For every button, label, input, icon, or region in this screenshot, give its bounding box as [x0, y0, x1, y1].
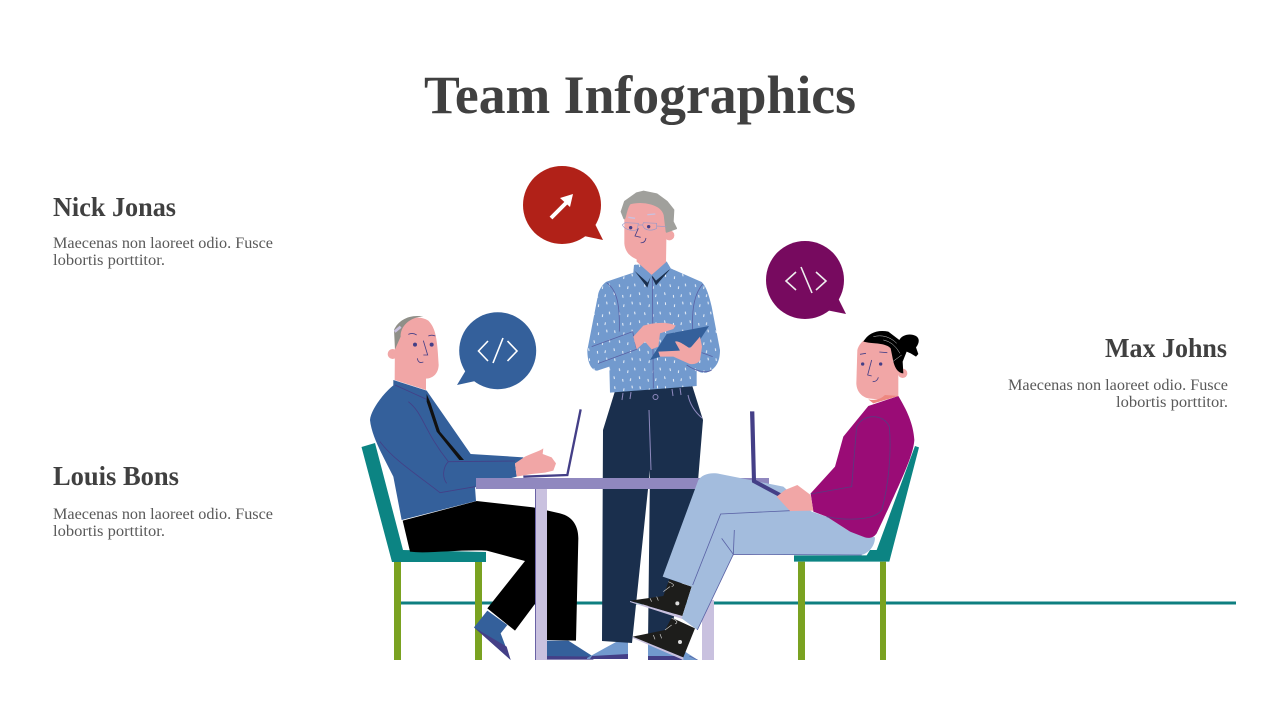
collar [634, 269, 670, 288]
person: middle man upper body [587, 192, 720, 393]
face [408, 333, 435, 363]
speech bubble: red arrow [523, 166, 603, 244]
shoe [547, 641, 593, 659]
floor line [400, 602, 1236, 604]
text block: Nick Jonas: Nick Jonas [53, 192, 176, 222]
jeans [663, 473, 875, 630]
laptop [750, 411, 782, 497]
table left leg [535, 489, 547, 660]
neck and head [395, 318, 439, 390]
sweater [811, 396, 914, 538]
text block: Louis Bons: lobortis porttitor. [53, 523, 165, 540]
text block: Louis Bons [53, 461, 273, 540]
tablet [650, 326, 709, 360]
text block: Nick Jonas: lobortis porttitor. [53, 252, 165, 269]
lower shoe [682, 653, 697, 660]
hair [622, 192, 676, 232]
left chair [362, 443, 486, 660]
laptop [523, 409, 581, 477]
table right leg [702, 600, 714, 660]
neck and head [856, 335, 898, 400]
text block: Max Johns: Max Johns [1105, 333, 1227, 363]
hair [863, 331, 919, 373]
person: left man seated (Nick) [370, 316, 593, 660]
face [860, 352, 887, 382]
shoes [587, 642, 628, 659]
title: Team Infographics [424, 65, 856, 125]
person: middle man standing [587, 385, 703, 660]
text block: Nick Jonas: Maecenas non laoreet odio. Fusce [53, 235, 273, 252]
back foot [474, 611, 511, 660]
person: right man seated (Max) [630, 331, 919, 660]
right chair [794, 446, 919, 660]
shirt [587, 262, 720, 393]
hands [633, 323, 676, 349]
sole, upper shoe [630, 601, 682, 619]
text block: Nick Jonas [53, 192, 273, 269]
text block: Louis Bons: Louis Bons [53, 461, 179, 491]
tie [427, 394, 464, 460]
neck and head [624, 199, 667, 275]
text block: Max Johns: lobortis porttitor. [1116, 394, 1228, 411]
text block: Max Johns [1008, 333, 1228, 411]
text block: Max Johns: Maecenas non laoreet odio. Fusce [1008, 377, 1228, 394]
glasses and face [622, 223, 667, 230]
speech bubble: purple code [766, 241, 846, 319]
trousers [403, 501, 578, 641]
hand [515, 448, 556, 477]
hand [777, 485, 813, 511]
table top [476, 478, 769, 489]
shirt [370, 380, 523, 520]
trousers [602, 385, 703, 643]
speech bubble: blue code [457, 312, 536, 389]
text block: Louis Bons: Maecenas non laoreet odio. Fusce [53, 506, 273, 523]
